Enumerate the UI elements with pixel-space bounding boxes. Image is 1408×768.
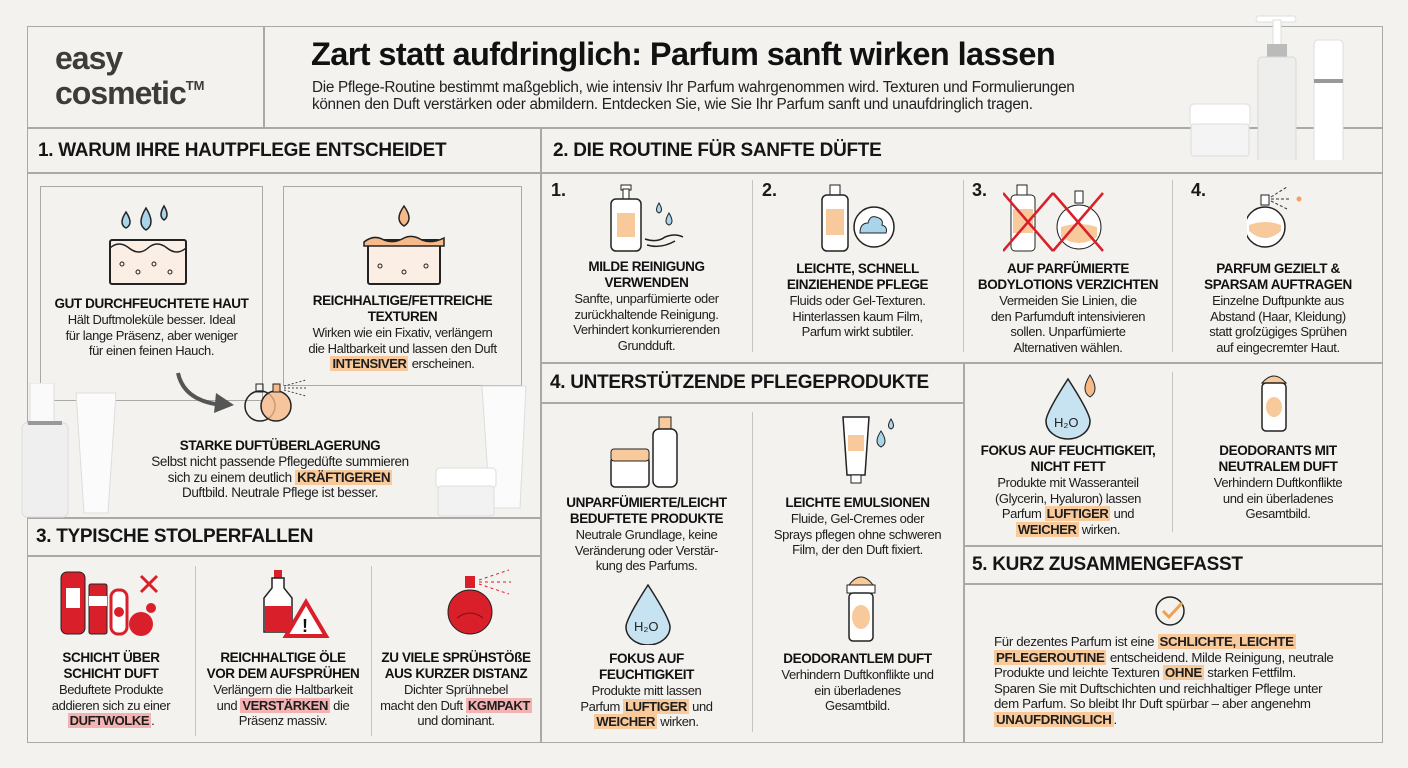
panel: right feature items: Gesamtbild.	[1246, 506, 1310, 521]
step 3: AUF PARFÜMIERTE	[1007, 261, 1129, 276]
logo: easy	[55, 40, 122, 76]
step 3: sollen. Unparfümierte	[1010, 324, 1126, 339]
arrow	[176, 372, 234, 413]
subtitle	[312, 79, 1075, 113]
panel: summary: Sparen Sie mit Duftschichten und reichhaltiger Pflege unter	[994, 680, 1322, 696]
panel: pflegeprodukte: BEDUFTETE PRODUKTE	[570, 511, 723, 526]
card: reichhaltige texturen	[283, 186, 522, 386]
icon: hydrated skin	[109, 204, 187, 285]
panel: pflegeprodukte: ein überladenes	[814, 682, 901, 698]
panel: pflegeprodukte: kung des Parfums.	[596, 558, 697, 573]
panel: section 1 cards: sich zu einem deutlich KRÄFTIGEREN	[168, 470, 390, 484]
panel: stolperfallen: VOR DEM AUFSPRÜHEN	[207, 666, 359, 681]
heading: section 1: 1. WARUM IHRE HAUTPFLEGE ENTSCHEIDET	[38, 140, 446, 161]
step 2: Fluids oder Gel-Texturen.	[790, 293, 925, 308]
panel: stolperfallen: addieren sich zu einer	[52, 698, 170, 712]
panel: stolperfallen: AUS KURZER DISTANZ	[385, 666, 527, 681]
step 2	[762, 180, 928, 339]
panel: section 1 cards: INTENSIVER erscheinen.	[332, 356, 475, 371]
step 4: auf eingecremter Haut.	[1216, 340, 1340, 354]
panel: routine steps	[551, 180, 1352, 354]
step 2: Hinterlassen kaum Film,	[792, 308, 923, 324]
panel: section 1 cards: TEXTUREN	[368, 309, 437, 324]
icon: deodorant	[1261, 376, 1287, 432]
panel: pflegeprodukte: Produkte mitt lassen	[592, 683, 701, 698]
step 3: den Parfumduft intensivieren	[991, 308, 1145, 324]
step 2: LEICHTE, SCHNELL	[796, 261, 919, 276]
step 4: 4.	[1191, 180, 1206, 200]
step 2: EINZIEHENDE PFLEGE	[787, 277, 928, 292]
panel: pflegeprodukte: Verhindern Duftkonflikte und	[781, 667, 934, 682]
panel: pflegeprodukte: FEUCHTIGKEIT	[599, 667, 694, 682]
panel: stolperfallen: DUFTWOLKE.	[70, 713, 154, 728]
step 1: Grundduft.	[618, 338, 675, 352]
step 3: 3.	[972, 180, 987, 200]
panel: pflegeprodukte: Film, der den Duft fixiert.	[792, 542, 923, 557]
panel: right feature items: NICHT FETT	[1031, 459, 1105, 474]
icon: check	[1155, 596, 1185, 626]
icon: roll-on deodorant	[846, 576, 876, 642]
panel: section 1 cards: Hält Duftmoleküle besser. Ideal	[68, 312, 235, 327]
heading: section 5: 5. KURZ ZUSAMMENGEFASST	[972, 554, 1243, 575]
step 4: PARFUM GEZIELT &	[1216, 261, 1340, 276]
panel: right feature items: DEODORANTS MIT	[1219, 443, 1337, 458]
panel: section 1 cards	[40, 186, 522, 500]
icon: jar and bottle	[610, 416, 678, 488]
panel: summary: dem Parfum. So bleibt Ihr Duft spürbar – aber angenehm	[994, 696, 1311, 711]
step 3: BODYLOTIONS VERZICHTEN	[978, 277, 1158, 292]
step 2: Parfum wirkt subtiler.	[802, 324, 913, 339]
panel: pflegeprodukte: Sprays pflegen ohne schweren	[774, 526, 941, 542]
panel: right feature items: FOKUS AUF FEUCHTIGKEIT,	[981, 443, 1155, 458]
panel: pflegeprodukte: Neutrale Grundlage, keine	[576, 527, 717, 542]
panel: pflegeprodukte: Fluide, Gel-Cremes oder	[791, 511, 924, 526]
step 4: SPARSAM AUFTRAGEN	[1204, 277, 1352, 292]
panel: stolperfallen: ZU VIELE SPRÜHSTÖßE	[381, 650, 531, 665]
step 1	[551, 180, 720, 352]
step 4	[1191, 180, 1352, 354]
heading: section 4: 4. UNTERSTÜTZENDE PFLEGEPRODUKTE	[550, 372, 929, 393]
subtitle: können den Duft verstärken oder abmildern. Entdecken Sie, wie Sie Ihr Parfum sanft und unaufdringlich tragen.	[312, 96, 1033, 113]
panel: pflegeprodukte: LEICHTE EMULSIONEN	[785, 495, 930, 510]
decorative bottles left	[22, 383, 116, 518]
heading: section 3: 3. TYPISCHE STOLPERFALLEN	[36, 526, 313, 547]
step 1: VERWENDEN	[605, 275, 688, 290]
step 1: zurückhaltende Reinigung.	[575, 306, 718, 322]
icon: h2o drop: H₂O	[634, 619, 659, 634]
icon: oily skin	[363, 204, 445, 285]
panel: pflegeprodukte: WEICHER wirken.	[596, 714, 699, 729]
icon: h2o with oil drop: H₂O	[1054, 415, 1079, 430]
panel: stolperfallen: Dichter Sprühnebel	[404, 682, 508, 697]
panel: right feature items: NEUTRALEM DUFT	[1219, 459, 1337, 474]
panel: section 1 cards: für lange Präsenz, aber weniger	[66, 328, 237, 342]
logo	[55, 40, 205, 111]
panel: right feature items: Produkte mit Wasseranteil	[997, 475, 1139, 490]
panel: stolperfallen: REICHHALTIGE ÖLE	[220, 650, 346, 665]
title: Zart statt aufdringlich: Parfum sanft wirken lassen	[311, 36, 1055, 72]
panel: right feature items: Parfum LUFTIGER und	[1002, 506, 1134, 521]
heading: section 2: 2. DIE ROUTINE FÜR SANFTE DÜFTE	[553, 140, 882, 161]
panel: stolperfallen: Verlängern die Haltbarkeit	[213, 682, 353, 697]
icon: h2o with oil drop	[1045, 374, 1096, 440]
step 4: Einzelne Duftpunkte aus	[1212, 293, 1344, 308]
step 4: statt groſzügiges Sprühen	[1209, 324, 1347, 339]
panel: summary: Produkte und leichte Texturen OHNE starken Fettfilm.	[994, 665, 1296, 680]
icon: h2o drop	[625, 584, 671, 645]
panel: summary: Für dezentes Parfum ist eine SCHLICHTE, LEICHTE	[994, 634, 1294, 649]
panel: summary	[994, 596, 1334, 727]
panel: section 1 cards: STARKE DUFTÜBERLAGERUNG	[180, 438, 380, 453]
panel: stolperfallen: und dominant.	[417, 713, 495, 728]
step 1: Sanfte, unparfümierte oder	[574, 291, 719, 306]
panel: right feature items: und ein überladenes	[1223, 490, 1333, 506]
step 4: Abstand (Haar, Kleidung)	[1210, 308, 1346, 324]
icon: oil warning	[263, 570, 330, 638]
step 3: Alternativen wählen.	[1013, 340, 1123, 354]
panel: section 1 cards: Wirken wie ein Fixativ, verlängern	[313, 325, 492, 340]
panel: right feature items	[981, 374, 1342, 537]
step 3	[972, 180, 1158, 354]
panel: stolperfallen: SCHICHT DUFT	[64, 666, 158, 681]
panel: section 1 cards: GUT DURCHFEUCHTETE HAUT	[54, 296, 249, 311]
panel: pflegeprodukte	[566, 416, 941, 729]
decorative product bottles top right	[1190, 16, 1344, 160]
panel: pflegeprodukte: DEODORANTLEM DUFT	[783, 651, 932, 666]
panel: stolperfallen: und VERSTÄRKEN die	[217, 698, 349, 712]
panel: summary: UNAUFDRINGLICH.	[996, 712, 1117, 726]
panel: pflegeprodukte: Gesamtbild.	[825, 698, 890, 713]
decorative bottles right	[436, 386, 526, 516]
panel: summary: PFLEGEROUTINE entscheidend. Milde Reinigung, neutrale	[996, 650, 1333, 664]
panel: pflegeprodukte: Veränderung oder Verstär-	[575, 542, 718, 558]
panel: stolperfallen: Präsenz massiv.	[239, 713, 327, 728]
panel: stolperfallen	[52, 570, 532, 728]
panel: section 1 cards: die Haltbarkeit und lassen den Duft	[308, 340, 497, 356]
panel: pflegeprodukte: UNPARFÜMIERTE/LEICHT	[566, 495, 727, 510]
panel: stolperfallen: Beduftete Produkte	[59, 682, 163, 697]
panel: section 1 cards: REICHHALTIGE/FETTREICHE	[313, 293, 492, 308]
icon: oil warning: !	[302, 616, 308, 636]
panel: right feature items: Verhindern Duftkonflikte	[1214, 475, 1342, 490]
step 2: 2.	[762, 180, 777, 200]
logo: cosmeticTM	[55, 75, 205, 111]
panel: section 1 cards: für einen feinen Hauch.	[89, 343, 214, 358]
card: gut durchfeuchtete haut	[40, 186, 263, 401]
panel: right feature items: WEICHER wirken.	[1018, 522, 1120, 536]
panel: pflegeprodukte: FOKUS AUF	[609, 651, 684, 666]
step 1: 1.	[551, 180, 566, 200]
step 1: MILDE REINIGUNG	[588, 259, 705, 274]
step 1: Verhindert konkurrierenden	[573, 322, 720, 337]
panel: section 1 cards: Duftbild. Neutrale Pflege ist besser.	[182, 485, 378, 500]
icon: red perfume spray	[448, 570, 511, 634]
panel: section 1 cards: Selbst nicht passende Pflegedüfte summieren	[151, 454, 409, 469]
icon: overlapping perfumes	[244, 380, 306, 422]
panel: stolperfallen: macht den Duft KGMPAKT	[380, 698, 530, 712]
icon: layered products	[60, 572, 158, 636]
panel: pflegeprodukte: Parfum LUFTIGER und	[580, 698, 713, 714]
subtitle: Die Pflege-Routine bestimmt maßgeblich, wie intensiv Ihr Parfum wahrgenommen wird. Texturen und Formulierungen	[312, 79, 1075, 96]
icon: tube with drops	[842, 416, 894, 484]
panel: right feature items: (Glycerin, Hyaluron) lassen	[995, 490, 1141, 506]
step 3: Vermeiden Sie Linien, die	[999, 293, 1137, 308]
panel: stolperfallen: SCHICHT ÜBER	[62, 650, 160, 665]
